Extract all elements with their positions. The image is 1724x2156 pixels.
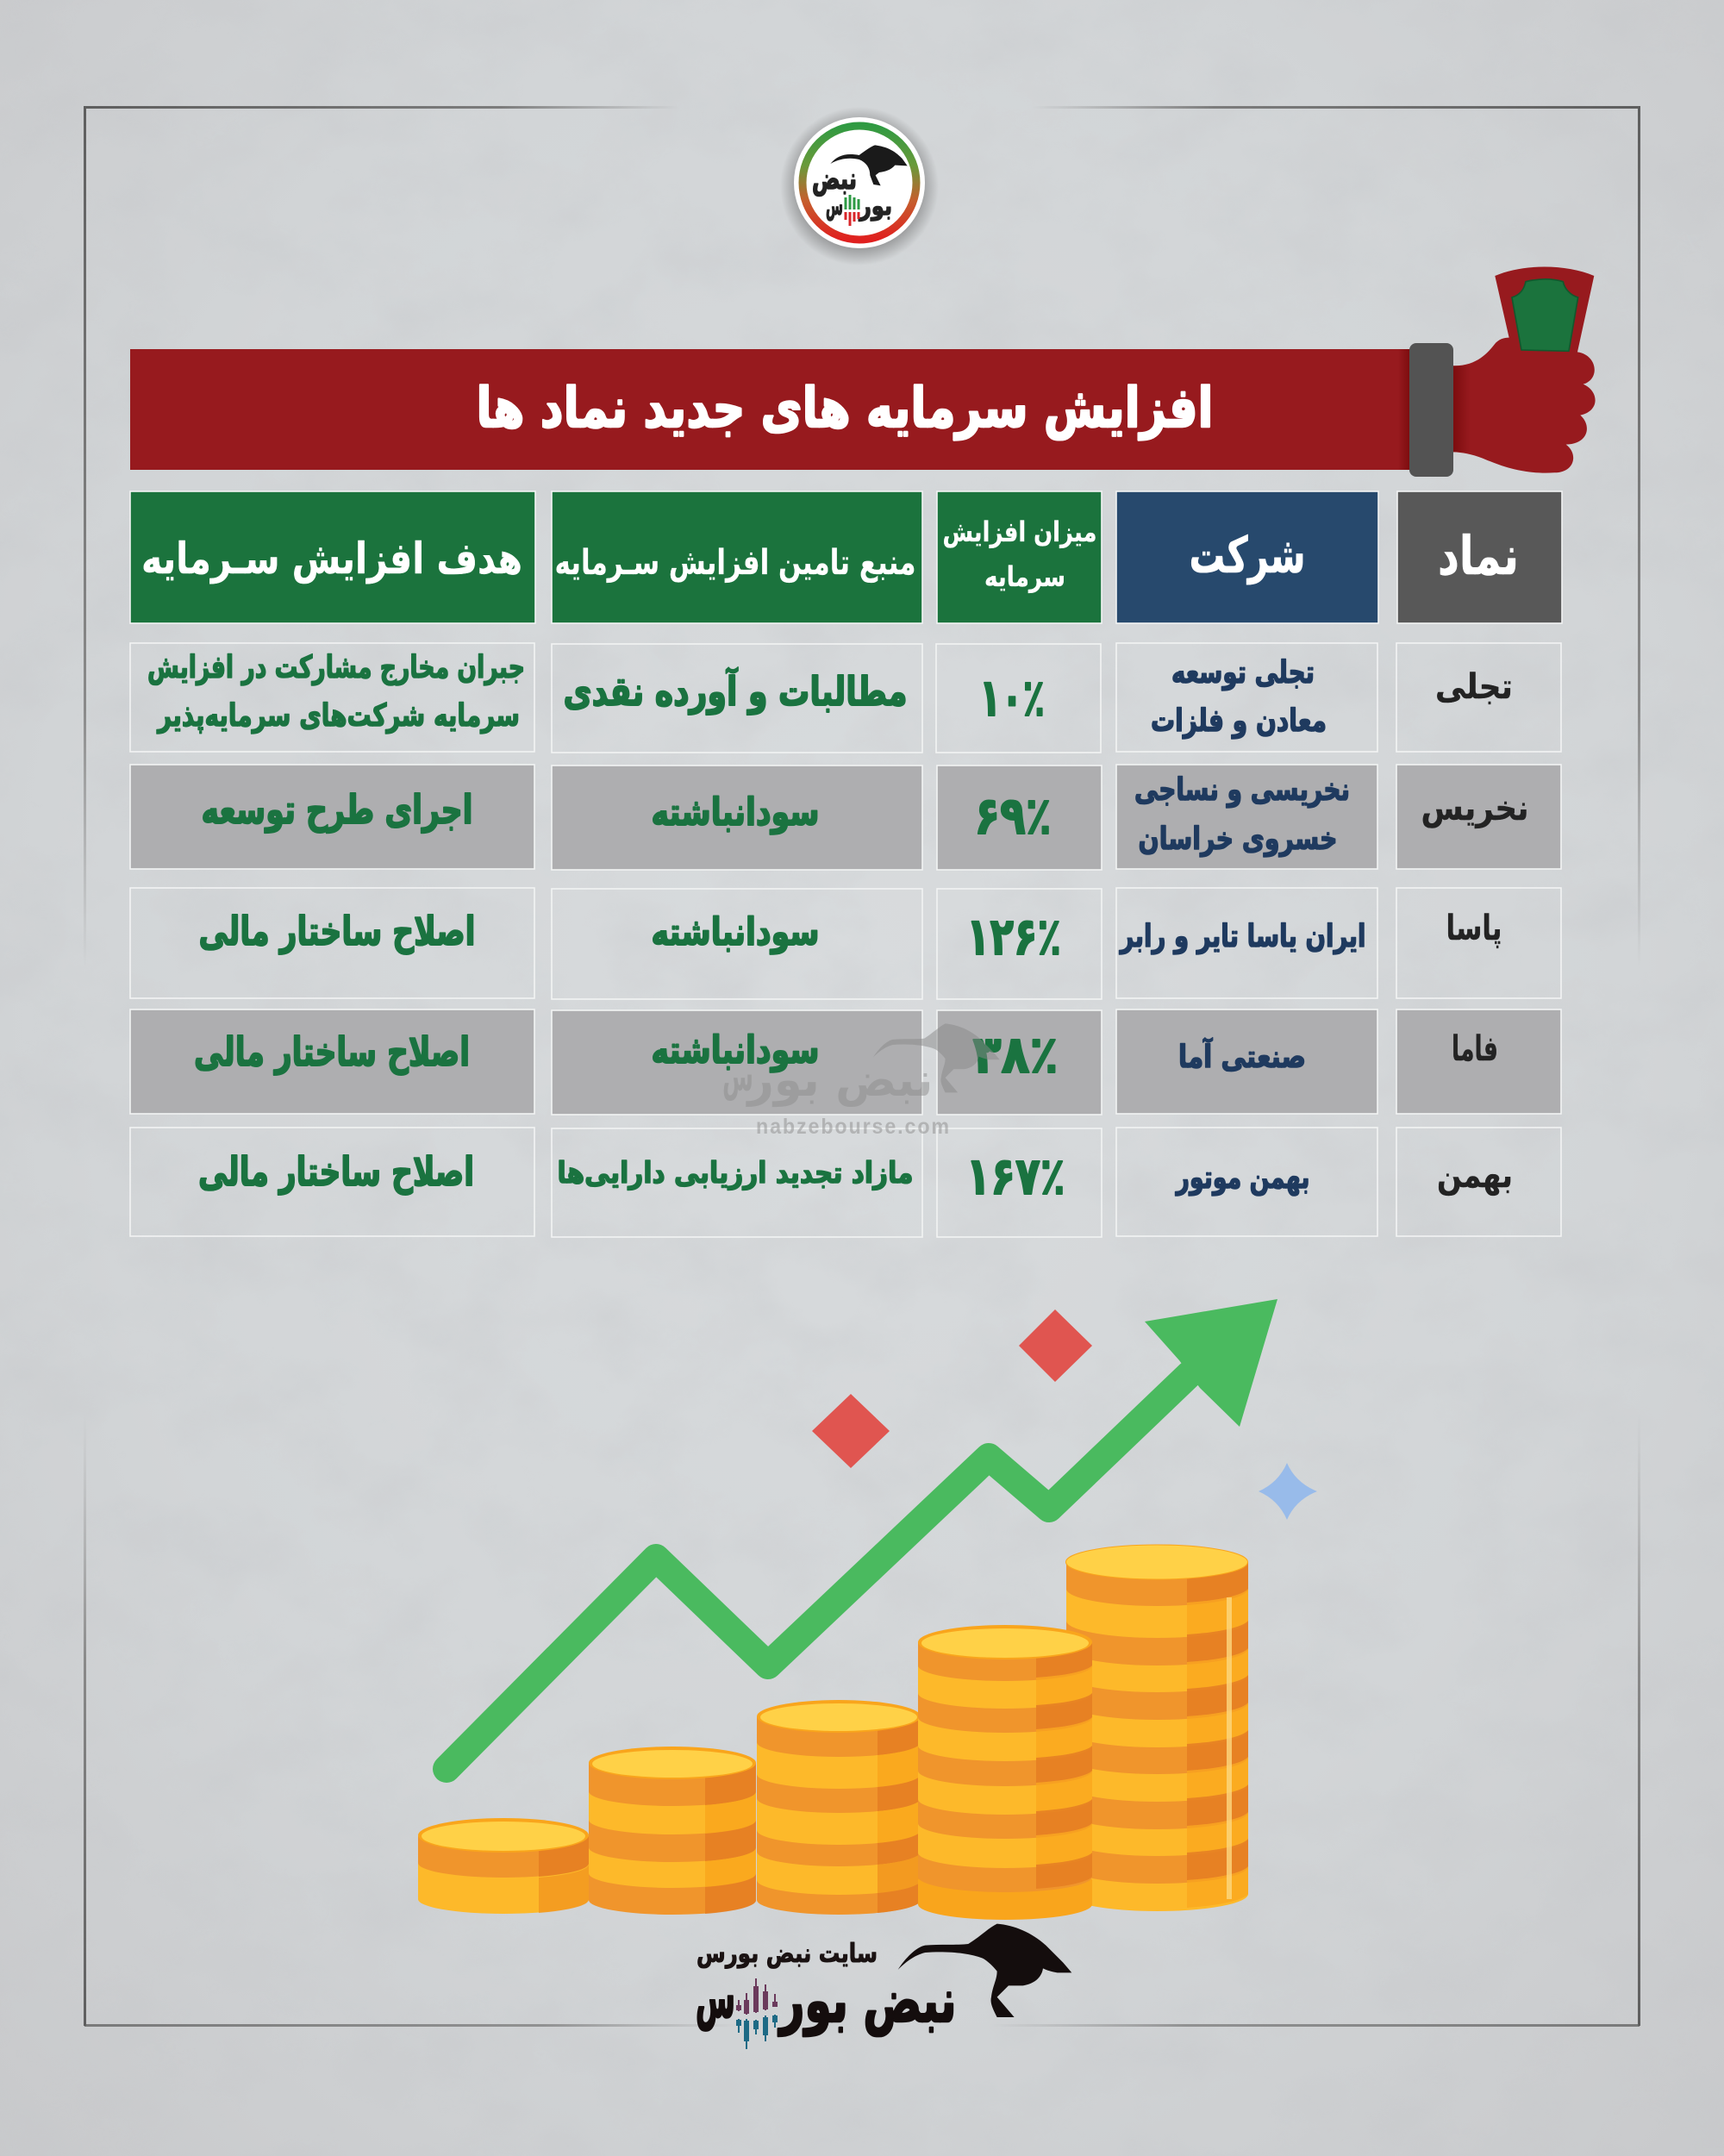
cell: goal: اصلاح ساختار مالی [194, 1028, 470, 1075]
cuff [1409, 343, 1453, 477]
table row: تجلی [130, 643, 1561, 753]
banner bar [130, 349, 1415, 470]
coin stack 4 [918, 1625, 1092, 1920]
cell: company: خسروی خراسان [1138, 822, 1338, 857]
table row: پاسا [130, 888, 1561, 999]
cell: goal [130, 888, 534, 998]
cell: goal: اصلاح ساختار مالی [198, 1148, 474, 1195]
coin stack 1 [418, 1818, 589, 1914]
header: نماد: نماد [1438, 524, 1519, 587]
cell: symbol [1396, 643, 1561, 752]
cell: symbol [1396, 888, 1561, 998]
icon: candlesticks [739, 1978, 775, 2049]
cell: source [552, 1128, 922, 1237]
cell: percent: ۱۶۷٪ [965, 1147, 1065, 1207]
cell: percent [937, 1010, 1102, 1115]
title banner with fist holding ticket [130, 266, 1596, 477]
header: میزان افزایش سرمایه [937, 491, 1102, 623]
cell: percent: ۱۲۶٪ [966, 907, 1061, 967]
top logo badge: بور [858, 191, 892, 222]
cell: company [1116, 1009, 1377, 1114]
cell: symbol [1396, 1009, 1561, 1114]
cell: goal [130, 765, 534, 869]
cell: goal [130, 1009, 534, 1114]
cell: symbol [1396, 765, 1561, 869]
watermark: bull logo and site name: س [722, 1051, 753, 1101]
cell: company: نخریسی و نساجی [1134, 772, 1350, 808]
header: شرکت: شرکت [1190, 526, 1305, 585]
cell: company [1116, 1128, 1377, 1236]
chart: rising green arrow [447, 1299, 1277, 1769]
header: نماد [1397, 491, 1562, 623]
coin stack 3 [757, 1700, 921, 1915]
cell: source [552, 889, 922, 999]
cell: symbol: فاما [1452, 1029, 1498, 1069]
table row: فاما [130, 1009, 1561, 1115]
cell: company [1116, 765, 1377, 869]
top logo badge: س [826, 191, 843, 222]
cell: symbol: بهمن [1437, 1156, 1513, 1196]
cell: source: سودانباشته [652, 791, 819, 834]
wordmark: نبض بور [778, 1965, 957, 2037]
cell: source [552, 644, 922, 753]
watermark: bull logo and site name [722, 1023, 1000, 1139]
cell: symbol: نخریس [1421, 789, 1529, 828]
cell: source: مطالبات و آورده نقدی [564, 667, 907, 715]
cell: goal: اجرای طرح توسعه [202, 786, 472, 833]
bottom brand logo: س [696, 1965, 735, 2031]
watermark: bull logo and site name: nabzebourse.com [756, 1115, 951, 1139]
cell: goal [130, 643, 534, 752]
icon: red diamond right [1019, 1309, 1092, 1382]
cell: company: معادن و فلزات [1151, 703, 1327, 739]
cell: symbol: پاسا [1446, 909, 1502, 948]
site label: سایت نبض بورس [696, 1939, 878, 1969]
icon: fist holding green ticket [1453, 266, 1596, 473]
cell: source [552, 766, 922, 870]
cell: source: مازاد تجدید ارزیابی دارایی‌ها [557, 1156, 914, 1190]
cell: percent [937, 1128, 1102, 1237]
bottom brand logo [696, 1924, 1071, 2049]
cell: goal: جبران مخارج مشارکت در افزایش [147, 650, 525, 685]
icon: bull [898, 1924, 1071, 2017]
table row: نخریس [130, 765, 1561, 870]
header: منبع تامین افزایش سرمایه [552, 491, 922, 623]
header: هدف افزایش سرمایه: هدف افزایش سـرمایه [141, 534, 522, 584]
cell: symbol: تجلی [1435, 667, 1513, 707]
header: میزان افزایش سرمایه: میزان افزایش [943, 516, 1096, 548]
cell: percent [937, 766, 1102, 870]
top logo badge: نبض [812, 162, 857, 197]
cell: source: سودانباشته [652, 1028, 819, 1072]
cell: source: سودانباشته [652, 910, 819, 954]
title text: افزایش سرمایه های جدید نماد ها [476, 377, 1214, 441]
cell: percent [937, 889, 1102, 999]
cell: company: ایران یاسا تایر و رابر [1119, 919, 1365, 954]
icon: red diamond left [812, 1394, 890, 1468]
cell: symbol [1396, 1128, 1561, 1236]
top logo badge [780, 107, 939, 266]
header: منبع تامین افزایش سرمایه: منبع تامین افزایش سـرمایه [555, 543, 915, 583]
header: شرکت [1116, 491, 1378, 623]
cell: company: بهمن موتور [1175, 1160, 1310, 1196]
cell: source [552, 1010, 922, 1115]
icon: blue sparkle [1259, 1463, 1317, 1520]
cell: goal [130, 1128, 534, 1236]
cell: goal: سرمایه شرکت‌های سرمایه‌پذیر [156, 698, 520, 734]
cell: percent: ۶۹٪ [974, 786, 1052, 847]
cell: company: صنعتی آما [1178, 1037, 1306, 1075]
cell: goal: اصلاح ساختار مالی [198, 908, 476, 954]
header: هدف افزایش سرمایه [130, 491, 535, 623]
header: میزان افزایش سرمایه: سرمایه [984, 560, 1065, 593]
table header row [130, 491, 1562, 623]
coin stack 5 [1065, 1545, 1248, 1911]
cell: percent: ۱۰٪ [979, 668, 1045, 728]
cell: company [1116, 643, 1377, 752]
banner shadow beside cuff [1398, 349, 1410, 470]
cell: percent [936, 644, 1101, 753]
cell: company [1116, 888, 1377, 998]
coin stack 2 [589, 1747, 756, 1915]
cell: company: تجلی توسعه [1171, 655, 1315, 691]
watermark: bull logo and site name: نبض بور [746, 1053, 933, 1108]
table row: بهمن [130, 1128, 1561, 1237]
cell: percent: ۳۸٪ [972, 1025, 1059, 1085]
